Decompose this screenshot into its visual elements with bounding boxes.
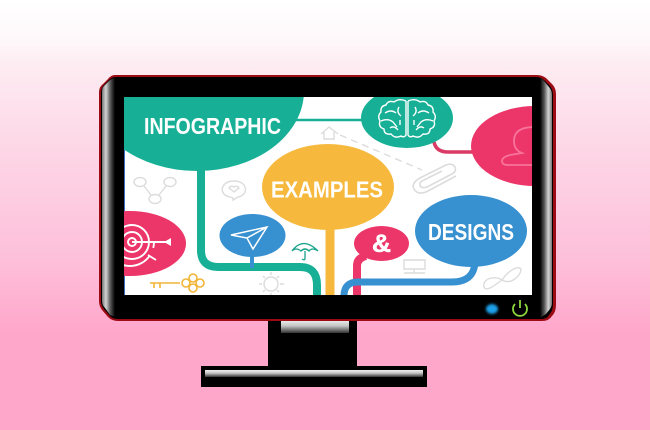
icon: paperclip	[413, 164, 456, 193]
connector lines	[201, 120, 475, 296]
icon: key	[150, 274, 204, 292]
icon: house	[321, 127, 338, 139]
icon: infinity	[484, 268, 521, 289]
icon: computer	[404, 260, 425, 273]
bubble: infographic	[124, 97, 304, 171]
dashed line	[340, 135, 422, 170]
bubble: paper plane	[220, 214, 286, 257]
bubble: person	[471, 106, 532, 186]
monitor stand	[201, 315, 427, 387]
bubble: brain	[361, 97, 453, 148]
bubble: designs	[415, 195, 527, 267]
bubble: ampersand	[354, 226, 409, 261]
grey line icons	[134, 127, 521, 296]
bubble: infographic: INFOGRAPHIC	[144, 113, 281, 139]
bubble: designs: DESIGNS	[428, 219, 514, 245]
bubble: ampersand: &	[372, 230, 391, 258]
bubble: examples	[262, 144, 394, 230]
icon: power button	[513, 300, 527, 316]
indicator: blue light	[486, 304, 498, 314]
icon: heart speech bubble	[222, 181, 245, 200]
bubble: target	[124, 211, 186, 276]
monitor frame	[99, 75, 556, 321]
icon: umbrella	[292, 244, 318, 260]
icon: nodes	[134, 178, 176, 204]
bubble: examples: EXAMPLES	[271, 176, 383, 202]
screen	[124, 97, 532, 295]
icon: sun	[259, 272, 284, 296]
